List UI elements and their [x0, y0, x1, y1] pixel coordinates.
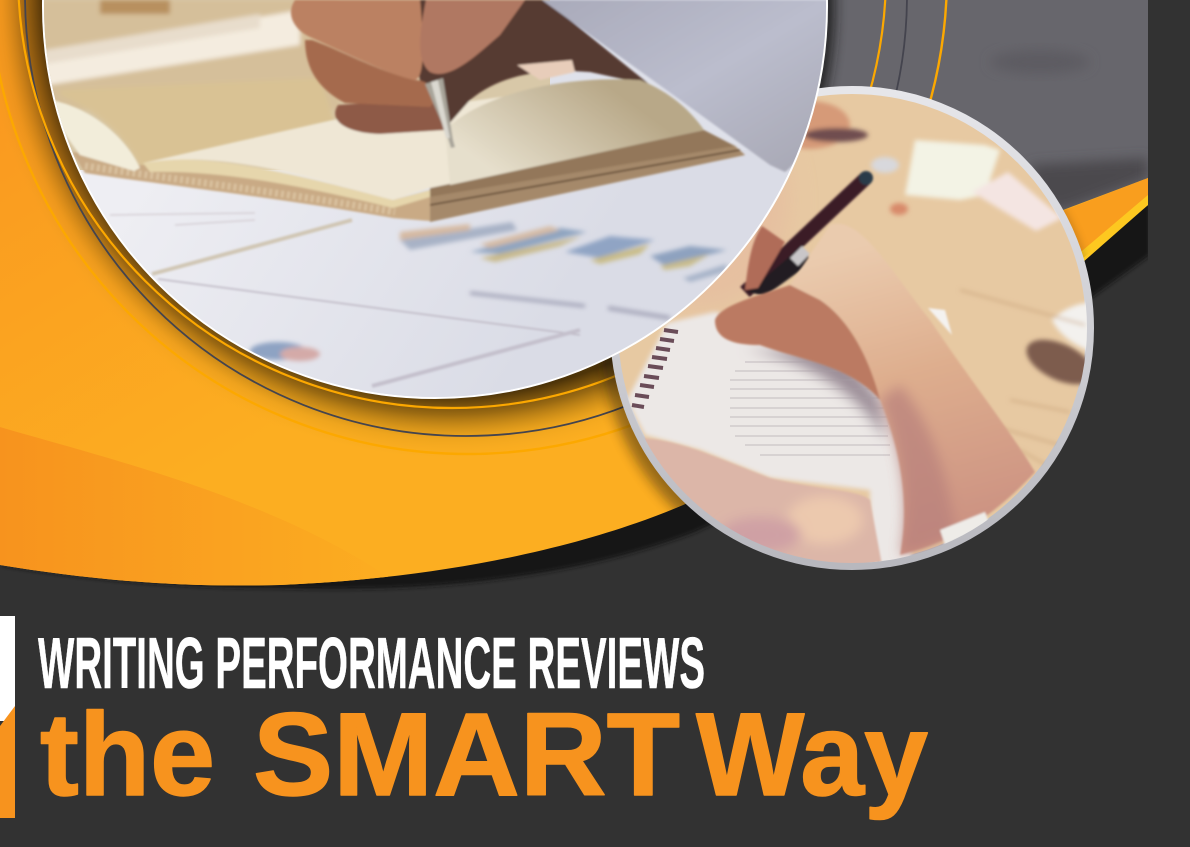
- accent orange part: [0, 706, 15, 818]
- book right page: [148, 96, 501, 200]
- wing tip orange: [1064, 178, 1148, 251]
- book gold inner: [91, 108, 334, 165]
- ring finger: [305, 40, 435, 107]
- small circle photo: hand writing in notebook: [610, 90, 1100, 566]
- rope right side: [430, 146, 745, 222]
- right margin bar: [1148, 0, 1190, 847]
- dark shadow behind hand: [400, 0, 650, 125]
- inner orange arc: [18, 0, 886, 408]
- orange swoosh: [0, 0, 1150, 600]
- middle finger: [291, 0, 423, 80]
- small circle shadow: [597, 208, 1088, 512]
- notebook: [627, 312, 912, 565]
- swoosh fill: [0, 0, 1148, 586]
- darker lower swoosh band: [0, 427, 388, 586]
- sticky note: [905, 140, 1000, 200]
- left title accent bar: [0, 616, 15, 818]
- rope book cover: [72, 152, 432, 222]
- notebook ruled lines: [730, 362, 890, 455]
- wing tip yellow: [1082, 195, 1148, 261]
- book left curl: [50, 100, 140, 171]
- rope texture: [85, 166, 395, 212]
- word: SMART: SMART: [253, 689, 680, 821]
- pinky finger: [335, 98, 445, 134]
- title line two: [40, 689, 928, 821]
- paper rule lines: [152, 220, 352, 274]
- word: Way: Way: [696, 689, 928, 821]
- outer orange arc: [0, 0, 947, 454]
- wood grain: [960, 290, 1085, 470]
- dark arc: [25, 0, 907, 436]
- writing hand and forearm: [791, 224, 1036, 556]
- word: the: the: [40, 689, 215, 821]
- index finger: [420, 0, 525, 74]
- back page shaded: [445, 79, 704, 185]
- pink note: [972, 172, 1062, 231]
- concentric arc lines: [0, 0, 947, 454]
- base behind the book and hand: [40, 0, 550, 170]
- second hand in the foreground: [640, 438, 882, 565]
- swoosh shadow: [0, 200, 1150, 589]
- coffee cup: [1050, 300, 1087, 353]
- blurred bar charts: [400, 222, 727, 318]
- pen: [745, 178, 866, 292]
- blurred small text: [470, 293, 585, 306]
- blurred pie chart: [250, 342, 320, 361]
- grey page corner: [542, 0, 832, 172]
- desk behind the book: [40, 0, 340, 110]
- grey upper right backdrop: [823, 0, 1148, 210]
- chart paper: [80, 169, 790, 397]
- wooden desk tones: [704, 202, 776, 294]
- accent white part: [0, 616, 15, 721]
- big circle photo: pen over notebook and charts: [40, 0, 832, 410]
- book right page edge: [430, 130, 735, 197]
- silver pen tip: [425, 78, 455, 148]
- big circle cast shadow: [0, 0, 622, 444]
- notebook spiral: [632, 330, 678, 407]
- small white object behind wrist: [928, 308, 952, 335]
- fingers behind pen: [745, 226, 785, 290]
